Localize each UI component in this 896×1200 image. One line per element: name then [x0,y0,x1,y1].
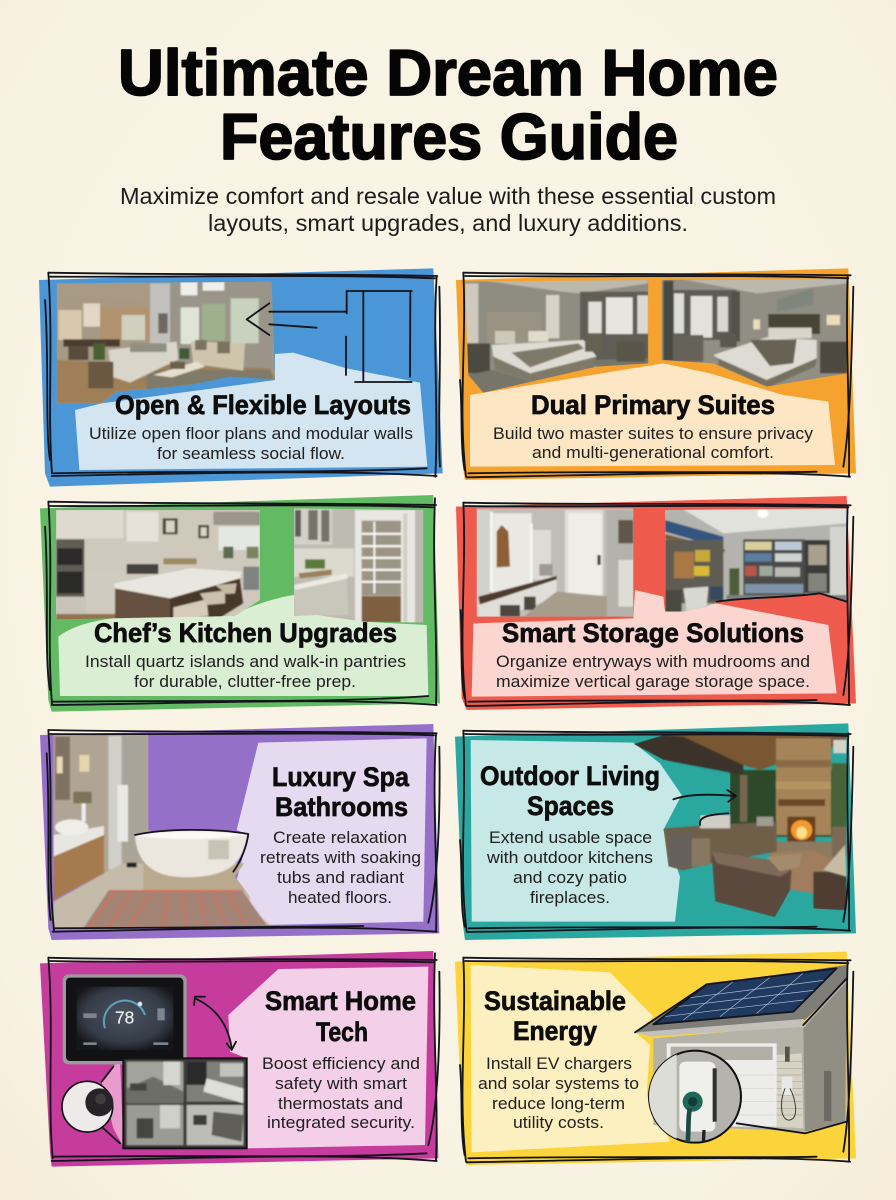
illustration: garage with solar roof [635,965,847,1133]
title: Ultimate Dream Home [118,36,778,109]
icon: EV charger inset [648,1050,741,1145]
icon: smart thermostat: 78 [115,1008,134,1028]
panel 7 artwork [40,951,440,1167]
panel: sustainable energy [455,952,856,1165]
photo: second bedroom [660,277,848,390]
heading: smart home tech: Smart Home [265,986,416,1016]
panel: chef's kitchen upgrades [40,495,440,712]
text: energy description: reduce long-term [492,1094,625,1113]
heading: sustainable energy: Energy [513,1016,597,1046]
heading: sustainable energy [484,986,626,1046]
text: spa description: Create relaxation [273,828,407,847]
text: outdoor description: Extend usable space [489,828,652,847]
text: energy description [478,1054,639,1132]
photo: mudroom entry [475,507,635,618]
text: energy description: and solar systems to [478,1074,639,1093]
photo: walk-in pantry [292,507,425,623]
photo: kitchen island [53,508,263,622]
heading: outdoor living spaces: Outdoor Living [480,761,660,791]
text: smart home description: integrated security. [267,1113,415,1132]
panel: dual primary suites [456,268,856,480]
text: spa description [260,828,421,907]
text: energy description: Install EV chargers [486,1054,632,1073]
title: Features Guide [220,100,678,173]
heading: smart storage solutions: Smart Storage Solutions [502,618,804,648]
photo: garage shelving [663,507,848,613]
text: storage description: Organize entryways with mudrooms and [496,652,810,671]
heading: dual primary suites: Dual Primary Suites [531,390,775,420]
heading: smart home tech [265,986,416,1047]
photo: first bedroom [463,278,650,395]
heading: luxury spa bathrooms [272,762,410,822]
subtitle: Maximize comfort and resale value with these essential custom [120,183,776,209]
text: suites description: and multi-generational comfort. [532,443,774,462]
photo: security camera feeds [123,1058,247,1148]
icon: sketched arrow [673,790,736,802]
subtitle [120,183,776,236]
panel: luxury spa bathrooms [40,724,440,940]
heading: open and flexible layouts: Open & Flexible Layouts [115,390,411,420]
text: kitchen description: for durable, clutter-free prep. [134,672,356,691]
text: energy description: utility costs. [513,1113,604,1132]
panel: open and flexible layouts [39,268,443,487]
panel 6 artwork [455,723,856,940]
text: spa description: heated floors. [288,888,392,907]
heading: smart home tech: Tech [316,1017,368,1047]
text: layouts description: for seamless social flow. [157,444,345,463]
heading: outdoor living spaces [480,761,660,821]
panel 1 artwork [39,268,443,487]
panel 4 artwork [456,496,856,710]
text: outdoor description: with outdoor kitchens [486,848,653,867]
photo: spa bathroom [52,733,272,932]
title [118,36,778,173]
icon: security camera [62,1067,120,1143]
text: suites description [493,424,814,462]
text: kitchen description: Install quartz islands and walk-in pantries [85,652,406,671]
heading: luxury spa bathrooms: Luxury Spa [272,762,410,792]
photo: open living room [53,280,280,407]
panel: smart home tech [40,951,440,1167]
text: storage description: maximize vertical garage storage space. [496,672,810,691]
icon: double-headed arrow [194,997,236,1050]
heading: sustainable energy: Sustainable [484,986,626,1016]
text: layouts description [89,424,413,463]
text: smart home description [262,1054,420,1132]
panel 3 artwork [40,495,440,712]
heading: luxury spa bathrooms: Bathrooms [275,792,408,822]
text: storage description [496,652,810,691]
text: outdoor description [486,828,653,907]
text: suites description: Build two master suites to ensure privacy [493,424,814,443]
text: kitchen description [85,652,406,691]
text: outdoor description: fireplaces. [530,888,610,907]
heading: outdoor living spaces: Spaces [527,791,614,821]
panel 5 artwork [40,724,440,940]
subtitle: layouts, smart upgrades, and luxury additions. [208,210,688,236]
text: spa description: tubs and radiant [277,868,404,887]
panel: smart storage solutions [456,496,856,710]
text: smart home description: thermostats and [278,1094,403,1113]
text: spa description: retreats with soaking [260,848,421,867]
panel 2 artwork [456,268,856,480]
text: smart home description: safety with smart [275,1074,407,1093]
icon: smart thermostat [63,974,187,1064]
panel 8 artwork [455,952,856,1165]
text: smart home description: Boost efficiency and [262,1054,420,1073]
icon: sketched arrow and door [247,291,412,382]
text: layouts description: Utilize open floor plans and modular walls [89,424,413,443]
heading: chef's kitchen upgrades: Chef’s Kitchen Upgrades [94,618,397,648]
text: outdoor description: and cozy patio [513,868,627,887]
photo: outdoor kitchen and fireplace [633,735,847,917]
panel: outdoor living spaces [455,723,856,940]
